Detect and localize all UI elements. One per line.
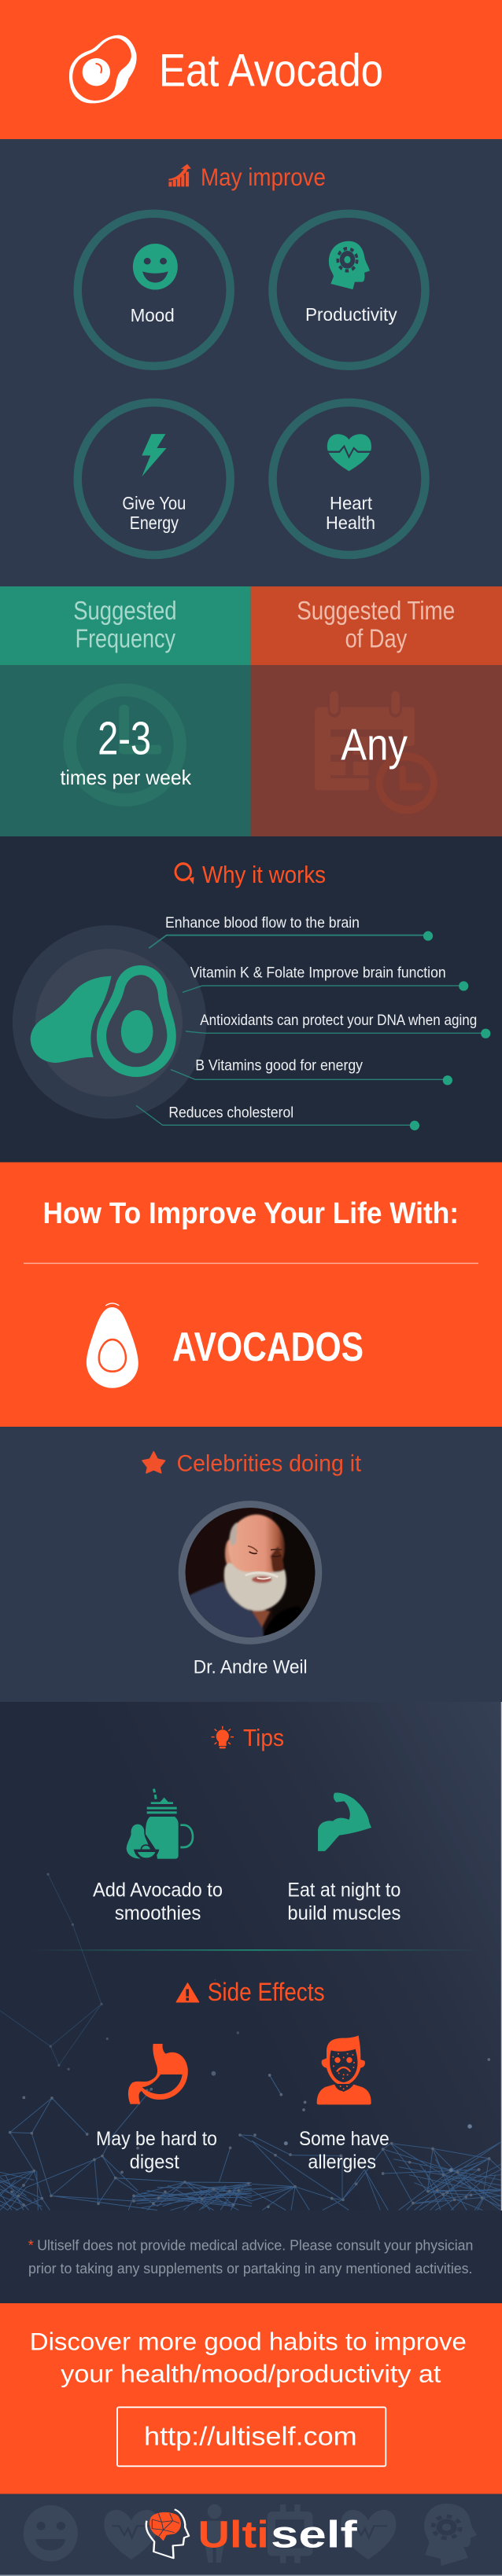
disclaimer text: Ultiself does not provide medical advice. Please consult your physician bbox=[37, 2237, 473, 2253]
benefit: mood bbox=[78, 214, 231, 366]
heading: suggested time of day: of Day bbox=[345, 624, 408, 652]
panel: how to improve banner bbox=[0, 1162, 502, 1427]
asterisk: * bbox=[28, 2237, 34, 2253]
icon: avocado smoothie jar bbox=[126, 1788, 193, 1860]
label: add avocado to smoothies: Add Avocado to bbox=[93, 1879, 223, 1901]
value: any: Any bbox=[341, 720, 408, 770]
icon: fried egg bbox=[69, 35, 137, 103]
icon: warning triangle bbox=[176, 1983, 199, 2002]
side effect: allergies bbox=[299, 2035, 389, 2173]
heading: suggested time of day: Suggested Time bbox=[297, 596, 455, 625]
icon: stomach bbox=[128, 2044, 188, 2104]
panel: suggested time of day bbox=[251, 586, 502, 836]
disclaimer text bbox=[28, 2237, 473, 2277]
icon: rising chart bbox=[168, 164, 191, 186]
benefit: productivity bbox=[272, 214, 425, 366]
value: 2-3: 2-3 bbox=[98, 712, 151, 764]
callout: b vitamins bbox=[171, 1056, 452, 1085]
label: may be hard to digest: digest bbox=[130, 2151, 179, 2173]
label: add avocado to smoothies: smoothies bbox=[115, 1902, 201, 1924]
title: Eat Avocado bbox=[159, 46, 383, 96]
panel: suggested frequency bbox=[0, 586, 251, 836]
panel: celebrities bbox=[142, 1451, 361, 1673]
label: some have allergies: allergies bbox=[308, 2151, 376, 2173]
wordmark: ulti: Ulti bbox=[198, 2515, 269, 2556]
icon: man with rash bbox=[317, 2035, 371, 2104]
callout: vitamin k and folate bbox=[183, 964, 468, 992]
benefit: energy bbox=[78, 402, 231, 555]
icon: ghost clock bbox=[70, 690, 180, 800]
callout: reduces cholesterol bbox=[136, 1104, 419, 1130]
label: eat at night: Eat at night to bbox=[287, 1879, 400, 1901]
callout: enhance blood flow: Enhance blood flow to the brain bbox=[165, 914, 360, 932]
photo: dr. andre weil bbox=[182, 1505, 320, 1645]
side effect: digestion bbox=[96, 2044, 217, 2173]
icon: light bulb bbox=[212, 1726, 234, 1748]
label: some have allergies: Some have bbox=[299, 2128, 389, 2150]
heading: may improve: May improve bbox=[201, 163, 326, 191]
header banner bbox=[0, 0, 502, 139]
label: heart health: Heart bbox=[330, 493, 373, 513]
panel: call to action bbox=[0, 2303, 502, 2494]
icon: smiley bbox=[133, 244, 178, 290]
label: may be hard to digest: May be hard to bbox=[96, 2128, 217, 2150]
callout: antioxidants bbox=[186, 1012, 490, 1038]
caption: dr. andre weil: Dr. Andre Weil bbox=[194, 1657, 308, 1678]
panel: footer bbox=[0, 2494, 502, 2576]
icon: ghost calendar and clock bbox=[315, 689, 434, 810]
button: ultiself url: http://ultiself.com bbox=[144, 2422, 357, 2451]
disclaimer text: prior to taking any supplements or partaking in any mentioned activities. bbox=[28, 2261, 472, 2277]
callout: enhance blood flow bbox=[149, 914, 433, 948]
icon: brain in head bbox=[146, 2509, 189, 2558]
callout: vitamin k and folate: Vitamin K & Folate Improve brain function bbox=[190, 964, 446, 981]
icon: lightning bolt bbox=[142, 434, 167, 476]
icon: avocado bbox=[87, 1303, 138, 1388]
label: give you energy bbox=[122, 493, 186, 533]
call to action text: Discover more good habits to improve bbox=[30, 2327, 467, 2355]
diagram: avocado in circles bbox=[13, 925, 206, 1119]
label: give you energy: Give You bbox=[122, 493, 186, 513]
icon: head with gear bbox=[329, 241, 370, 289]
caption: times per week: times per week bbox=[60, 766, 192, 789]
callout: reduces cholesterol: Reduces cholesterol bbox=[168, 1104, 293, 1121]
label: mood: Mood bbox=[131, 305, 175, 325]
heading: celebrities doing it: Celebrities doing it bbox=[177, 1451, 362, 1476]
label: productivity: Productivity bbox=[305, 304, 397, 325]
heading: suggested frequency bbox=[73, 596, 177, 652]
icon: star bbox=[142, 1452, 165, 1473]
icon: magnifier bbox=[175, 864, 194, 884]
call to action text: your health/mood/productivity at bbox=[61, 2360, 441, 2388]
heading: side effects: Side Effects bbox=[208, 1978, 325, 2006]
button: ultiself url bbox=[117, 2407, 386, 2466]
callout: b vitamins: B Vitamins good for energy bbox=[195, 1056, 363, 1074]
tip: smoothies bbox=[93, 1788, 223, 1924]
label: avocados: AVOCADOS bbox=[172, 1325, 364, 1370]
label: eat at night bbox=[287, 1879, 400, 1924]
ghost icon strip bbox=[24, 2504, 477, 2566]
panel: disclaimer bbox=[0, 2210, 502, 2303]
heading: suggested time of day bbox=[297, 596, 455, 652]
label: heart health bbox=[326, 493, 375, 533]
heading: suggested frequency: Suggested bbox=[73, 596, 177, 625]
panel: why it works bbox=[0, 836, 502, 1162]
panel: tips and side effects bbox=[0, 1702, 502, 2210]
logo: ultiself bbox=[146, 2509, 358, 2558]
icon: flexed arm bbox=[318, 1792, 371, 1851]
heading: why it works: Why it works bbox=[202, 861, 326, 888]
tip: muscles bbox=[287, 1792, 400, 1924]
call to action text bbox=[30, 2327, 467, 2388]
icon: heart with pulse bbox=[327, 434, 371, 471]
label: some have allergies bbox=[299, 2128, 389, 2173]
heading: tips: Tips bbox=[243, 1724, 284, 1751]
label: eat at night: build muscles bbox=[287, 1902, 400, 1924]
label: may be hard to digest bbox=[96, 2128, 217, 2173]
label: give you energy: Energy bbox=[130, 513, 179, 533]
wordmark: self: self bbox=[271, 2515, 358, 2556]
label: add avocado to smoothies bbox=[93, 1879, 223, 1924]
heading: how to improve your life: How To Improve Your Life With: bbox=[42, 1197, 459, 1230]
heading: suggested frequency: Frequency bbox=[76, 624, 175, 652]
benefit: heart health bbox=[272, 402, 425, 555]
panel: may improve bbox=[0, 139, 502, 586]
label: heart health: Health bbox=[326, 513, 375, 533]
